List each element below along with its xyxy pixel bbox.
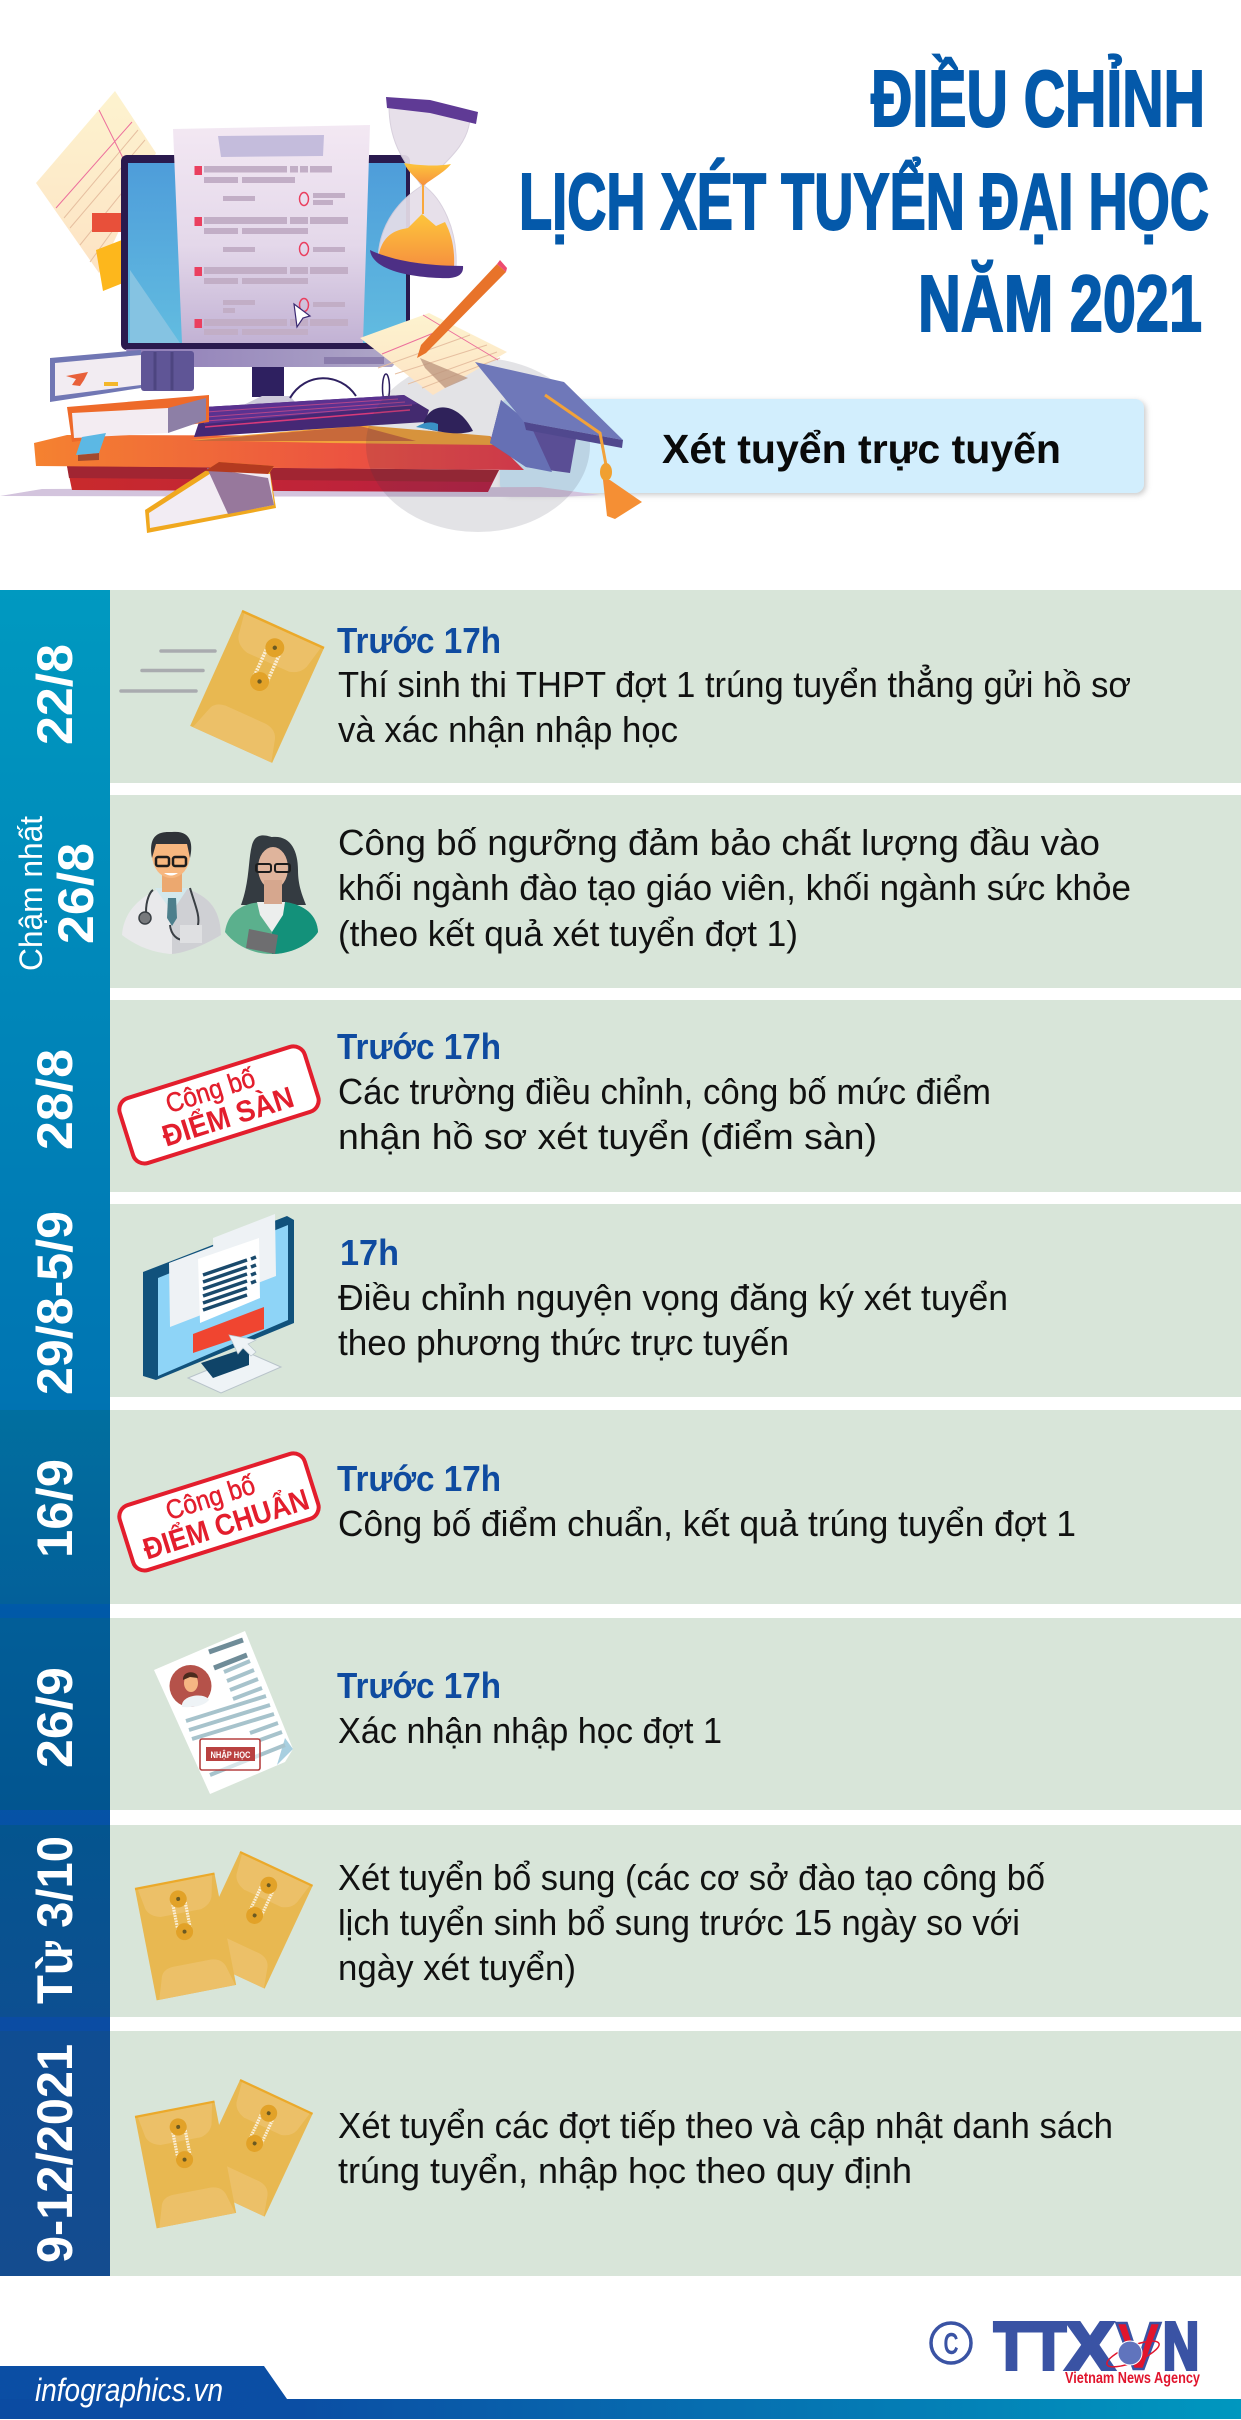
floor shadow xyxy=(0,487,600,497)
date: 16/9 xyxy=(27,1459,83,1558)
stamp: công bố điểm chuẩn: ĐIỂM CHUẨN xyxy=(139,1482,313,1566)
copyright symbol xyxy=(931,2323,971,2363)
text: Xét tuyển bổ sung (các cơ sở đào tạo công bố xyxy=(338,1857,1045,1898)
text: Công bố ngưỡng đảm bảo chất lượng đầu vào xyxy=(338,822,1100,863)
keyboard xyxy=(194,395,429,437)
text xyxy=(337,1458,1076,1544)
orange book xyxy=(67,395,209,461)
text: Các trường điều chỉnh, công bố mức điểm xyxy=(338,1071,991,1112)
text: Trước 17h xyxy=(337,620,501,661)
monitor xyxy=(121,155,410,409)
icon: flying envelope xyxy=(121,611,324,763)
text: ngày xét tuyển) xyxy=(338,1947,576,1988)
text: Điều chỉnh nguyện vọng đăng ký xét tuyển xyxy=(338,1277,1008,1318)
copyright symbol: C xyxy=(944,2326,958,2361)
hourglass xyxy=(370,97,478,278)
text: Xác nhận nhập học đợt 1 xyxy=(338,1710,722,1751)
illustration: computer desk with exam form, hourglass, books and graduation cap xyxy=(0,91,642,533)
icon: enrolment document: NHẬP HỌC xyxy=(210,1749,251,1760)
text: Trước 17h xyxy=(337,1665,501,1706)
text: Thí sinh thi THPT đợt 1 trúng tuyển thẳng gửi hồ sơ xyxy=(338,663,1131,705)
text xyxy=(338,1232,1008,1363)
text xyxy=(338,2105,1113,2191)
mouse xyxy=(416,407,473,433)
text: Xét tuyển các đợt tiếp theo và cập nhật danh sách xyxy=(338,2105,1113,2146)
icon: enrolment document xyxy=(154,1631,293,1794)
text: 17h xyxy=(340,1232,399,1273)
logo: TTXVN Vietnam News Agency: Vietnam News Agency xyxy=(1065,2370,1200,2387)
text: khối ngành đào tạo giáo viên, khối ngành sức khỏe xyxy=(338,867,1131,908)
text: và xác nhận nhập học xyxy=(338,709,678,750)
title xyxy=(519,54,1209,348)
date: 28/8 xyxy=(27,1049,83,1150)
gray circle xyxy=(366,358,590,532)
date: 26/9 xyxy=(27,1667,83,1768)
stamp: công bố điểm sàn xyxy=(116,1043,322,1167)
row 3: 28/8 xyxy=(27,1000,1241,1192)
date: Chậm nhất xyxy=(13,816,49,971)
logo: TTXVN Vietnam News Agency xyxy=(994,2309,1200,2387)
logo: TTXVN Vietnam News Agency: V xyxy=(1116,2309,1161,2384)
icon: two envelopes xyxy=(135,1852,313,2000)
date column xyxy=(0,590,110,2276)
open book on floor xyxy=(145,462,276,533)
exam form document xyxy=(173,125,370,343)
row 4: 29/8-5/9 xyxy=(27,1204,1241,1397)
stamp: công bố điểm chuẩn: Công bố xyxy=(162,1470,259,1526)
footer bar with website: infographics.vn xyxy=(35,2372,223,2408)
stamp: công bố điểm sàn: ĐIỂM SÀN xyxy=(158,1080,298,1153)
text: Công bố điểm chuẩn, kết quả trúng tuyển đợt 1 xyxy=(338,1503,1076,1544)
text: (theo kết quả xét tuyển đợt 1) xyxy=(338,913,798,954)
date: Từ 3/10 xyxy=(27,1836,83,2004)
date: 9-12/2021 xyxy=(27,2044,83,2263)
logo: TTXVN Vietnam News Agency: N xyxy=(1163,2309,1199,2384)
stamp: công bố điểm sàn: Công bố xyxy=(162,1063,259,1119)
row 6: 26/9 xyxy=(27,1618,1241,1810)
date: 26/8 xyxy=(48,843,104,944)
notepaper behind monitor xyxy=(36,91,156,291)
text xyxy=(338,1857,1045,1988)
text: nhận hồ sơ xét tuyển (điểm sàn) xyxy=(338,1116,877,1157)
text: lịch tuyển sinh bổ sung trước 15 ngày so với xyxy=(338,1902,1020,1943)
text xyxy=(337,1665,722,1751)
row 2: 26/8 xyxy=(13,795,1241,988)
subtitle banner: Xét tuyển trực tuyến xyxy=(662,426,1061,472)
desk xyxy=(34,425,524,492)
footer bar with website xyxy=(0,2366,1241,2419)
date xyxy=(13,816,104,971)
row 7: từ 3/10 xyxy=(27,1825,1241,2017)
text: Trước 17h xyxy=(337,1458,501,1499)
icon: computer with online form xyxy=(143,1214,294,1393)
date: 22/8 xyxy=(27,644,83,745)
logo: TTXVN Vietnam News Agency: T xyxy=(1031,2309,1066,2384)
graduation cap xyxy=(475,362,642,519)
stamp: công bố điểm chuẩn xyxy=(116,1450,322,1574)
logo: TTXVN Vietnam News Agency: X xyxy=(1066,2309,1114,2384)
logo: TTXVN Vietnam News Agency: T xyxy=(994,2309,1029,2384)
text xyxy=(338,822,1131,954)
date: 29/8-5/9 xyxy=(27,1211,83,1395)
text: theo phương thức trực tuyến xyxy=(338,1322,789,1363)
row 8: 9-12/2021 xyxy=(27,2031,1241,2276)
icon: two envelopes xyxy=(135,2080,313,2228)
subtitle banner xyxy=(500,399,1144,493)
icon: doctor and teacher xyxy=(122,832,318,954)
text: trúng tuyển, nhập học theo quy định xyxy=(338,2150,912,2191)
row 5: 16/9 xyxy=(27,1410,1241,1604)
front notepaper and pencil xyxy=(360,260,507,395)
text: Trước 17h xyxy=(337,1026,501,1067)
row 1: 22/8 xyxy=(27,590,1241,783)
text xyxy=(337,620,1131,750)
text xyxy=(337,1026,991,1157)
book stack xyxy=(50,350,194,402)
